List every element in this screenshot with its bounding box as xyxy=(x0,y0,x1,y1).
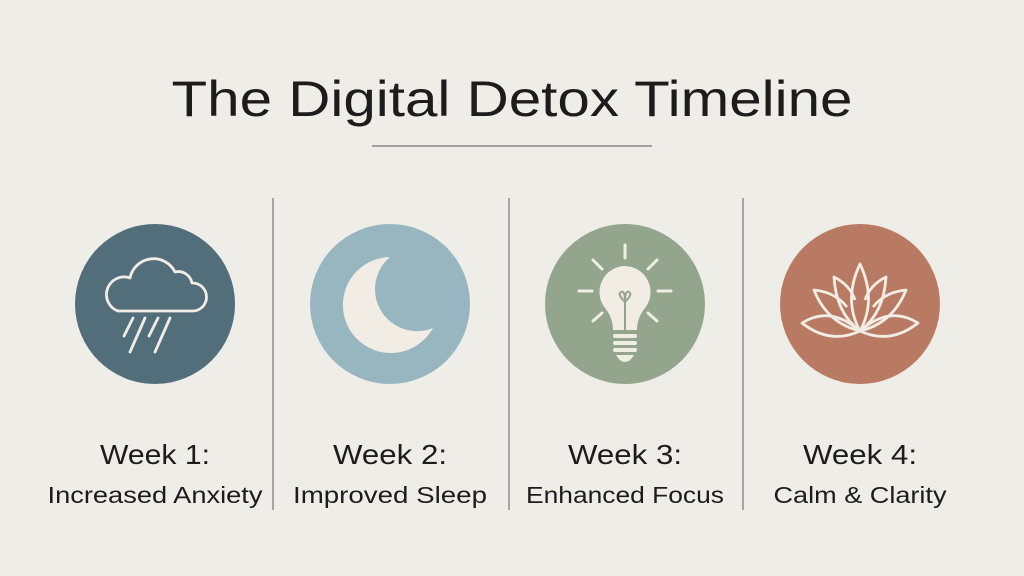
text: week 1 label: Week 1: xyxy=(100,439,210,470)
panel: week 2 xyxy=(293,224,487,508)
icon: lotus circle xyxy=(780,224,940,384)
panel: week 4 xyxy=(774,224,947,508)
icon: rain cloud circle xyxy=(75,224,235,384)
panel: week 3 xyxy=(526,224,724,508)
panel: week 1: Increased Anxiety xyxy=(48,482,263,508)
icon: moon circle xyxy=(310,224,470,384)
panel: week 1 xyxy=(48,224,263,508)
panel: week 2: Improved Sleep xyxy=(293,482,487,508)
text: week 3 label: Week 3: xyxy=(568,439,682,470)
panel: week 3: Enhanced Focus xyxy=(526,482,724,508)
title: The Digital Detox Timeline xyxy=(172,71,852,127)
icon: lightbulb circle xyxy=(545,224,705,384)
text: week 4 label: Week 4: xyxy=(803,439,917,470)
panel: week 4: Calm & Clarity xyxy=(774,482,947,508)
text: week 2 label: Week 2: xyxy=(333,439,447,470)
